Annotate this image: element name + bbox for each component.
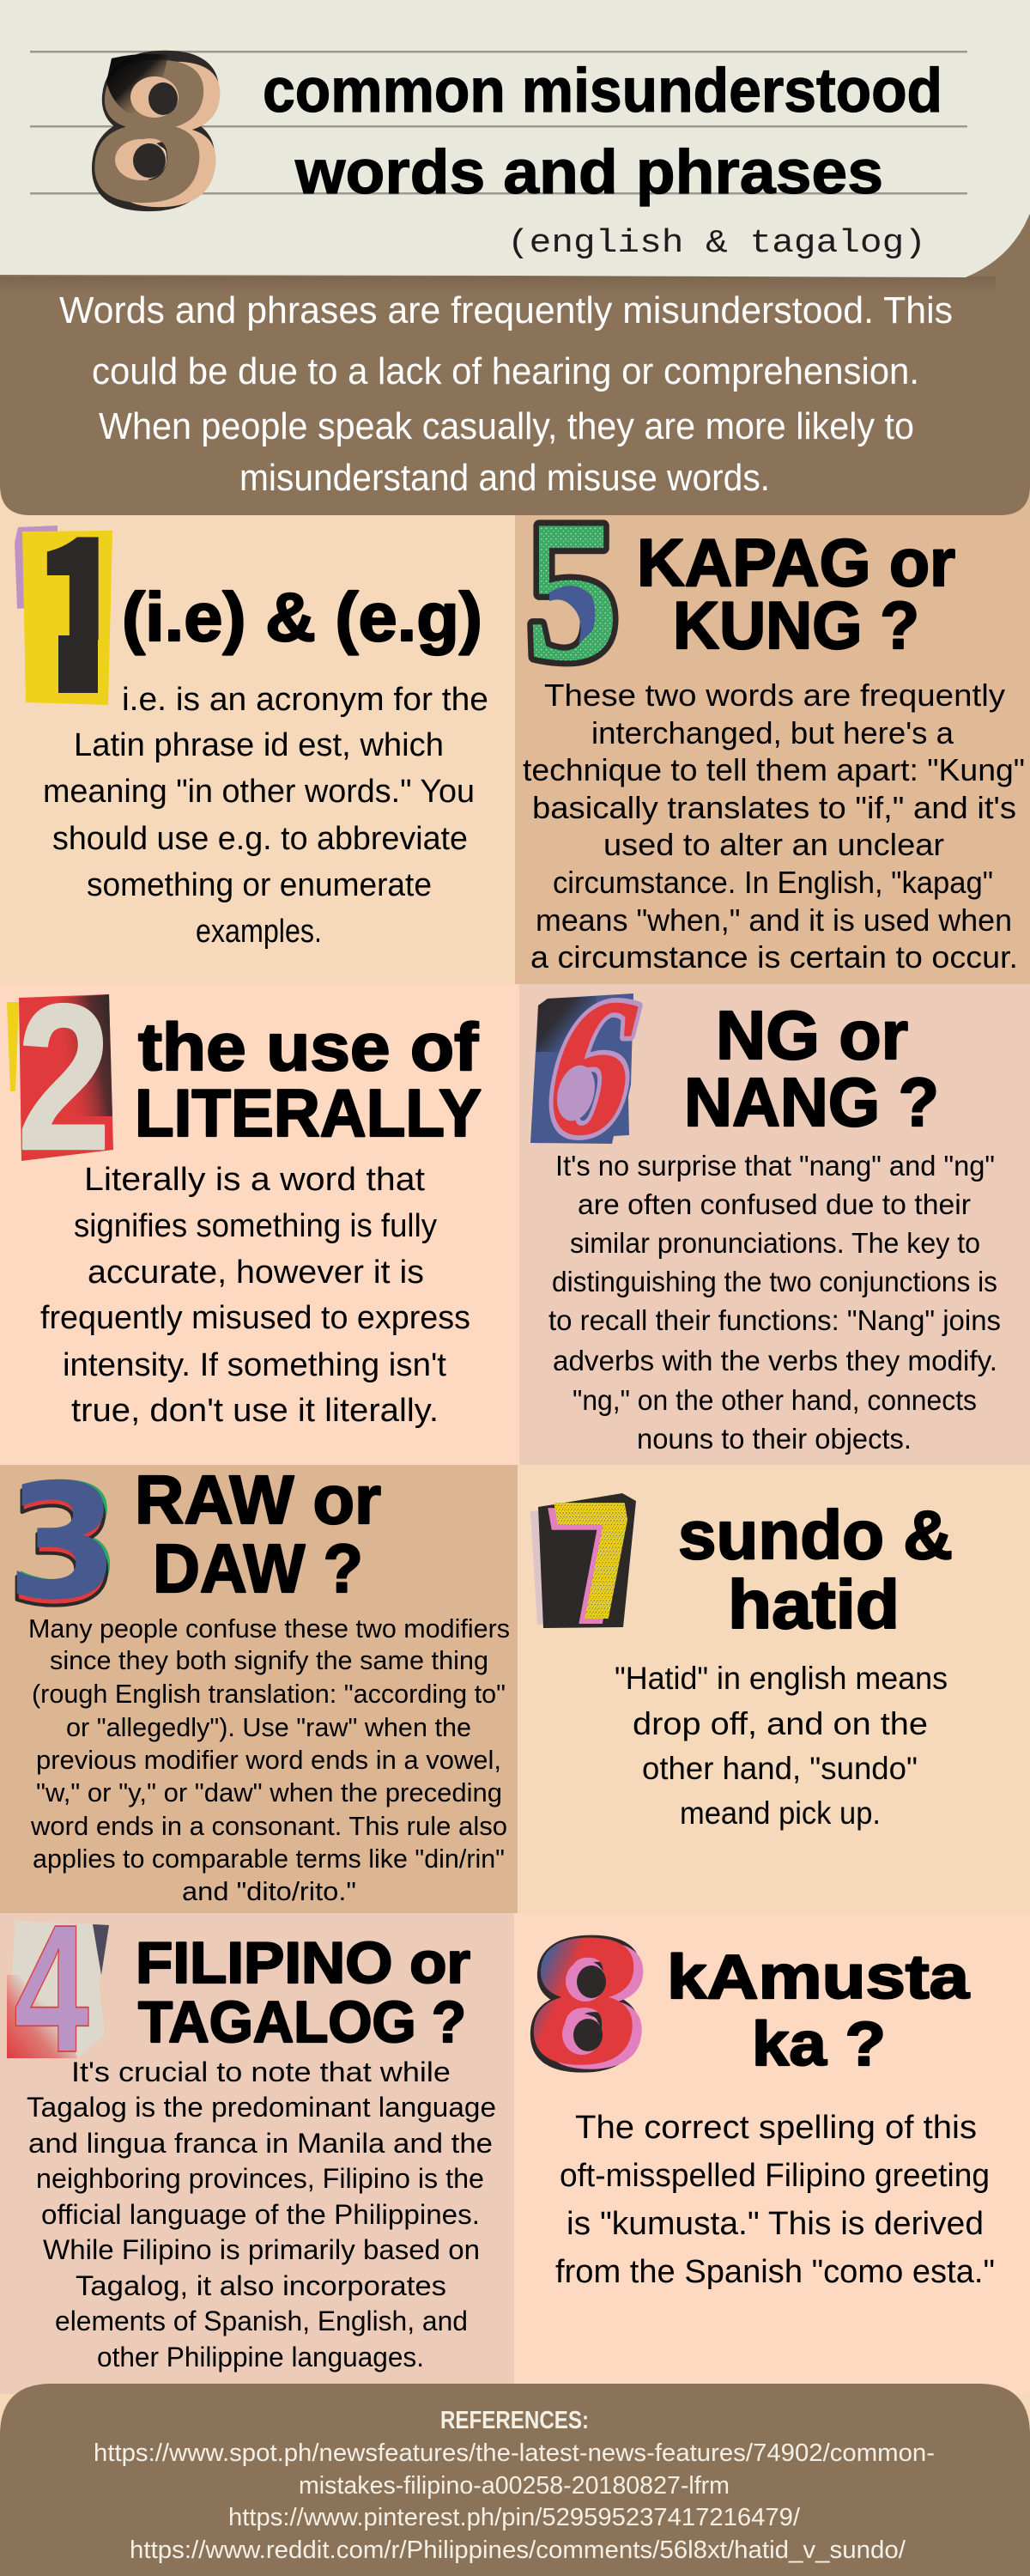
body text: since they both signify the same thing: [50, 1645, 488, 1675]
body text: something or enumerate: [87, 867, 432, 903]
body text: While Filipino is primarily based on: [43, 2234, 480, 2265]
body text: is "kumusta." This is derived: [566, 2206, 984, 2242]
body text: true, don't use it literally.: [71, 1393, 439, 1429]
body text: intensity. If something isn't: [63, 1347, 446, 1383]
icon: number 6 on blue paper: 6: [525, 959, 662, 1176]
icon: number 6 on blue paper: 6: [525, 959, 662, 1176]
body text: and lingua franca in Manila and the: [28, 2128, 493, 2159]
body text: used to alter an unclear: [603, 827, 944, 862]
body text: nouns to their objects.: [637, 1423, 912, 1455]
reference links: https://www.pinterest.ph/pin/529595237417216479/: [228, 2504, 801, 2531]
icon: large number 8: 8: [75, 26, 225, 246]
icon: number 3: 3: [9, 1450, 123, 1635]
icon: number 8: 8: [528, 1911, 661, 2106]
icon: number 3: 3: [6, 1450, 119, 1635]
intro text: could be due to a lack of hearing or comprehension.: [92, 350, 919, 392]
body text: examples.: [196, 914, 322, 950]
body text: applies to comparable terms like "din/rin": [33, 1844, 505, 1874]
body text: means "when," and it is used when: [536, 902, 1012, 938]
heading: RAW or: [135, 1461, 381, 1538]
icon: number 5: 5: [525, 479, 620, 703]
panel: title paper: [0, 0, 1030, 277]
body text: Tagalog, it also incorporates: [76, 2270, 446, 2301]
panel: 5 kapag or kung: [515, 479, 1030, 984]
body text: adverbs with the verbs they modify.: [553, 1345, 997, 1376]
body text: interchanged, but here's a: [591, 715, 954, 750]
icon: number 1 on yellow paper: [15, 526, 112, 705]
body text: from the Spanish "como esta.": [555, 2254, 995, 2290]
heading: FILIPINO or: [136, 1930, 470, 1996]
heading line two: NANG ?: [684, 1064, 939, 1140]
body text: [615, 1661, 948, 1831]
body text: circumstance. In English, "kapag": [553, 865, 993, 900]
icon: number 8: 8: [520, 1909, 653, 2105]
icon: number 2 on red paper: 2: [17, 961, 111, 1194]
body text: drop off, and on the: [633, 1706, 928, 1741]
body text: a circumstance is certain to occur.: [530, 939, 1018, 975]
body text: i.e. is an acronym for the: [122, 682, 488, 718]
icon: number 7 on dark paper: 7: [534, 1477, 656, 1662]
body text: [27, 2057, 496, 2372]
body text: frequently misused to express: [40, 1300, 470, 1336]
icon: large number 8: 8: [79, 23, 233, 247]
body text: The correct spelling of this: [575, 2110, 977, 2146]
panel: 7 sundo and hatid: [518, 1465, 1030, 1913]
body text: [555, 2110, 995, 2290]
panel: 4 filipino or tagalog: [0, 1886, 514, 2394]
heading: (i.e) & (e.g): [122, 579, 482, 655]
intro text: When people speak casually, they are more likely to: [99, 405, 914, 447]
panel: 2 the use of literally: [0, 961, 519, 1465]
icon: large number 8: 8: [91, 26, 241, 250]
heading line two: KUNG ?: [673, 587, 919, 663]
heading: KAPAG or: [637, 525, 955, 600]
body text: (rough English translation: "according to": [32, 1679, 506, 1709]
body text: similar pronunciations. The key to: [570, 1227, 980, 1259]
icon: number 4 on torn paper: 4: [14, 1886, 89, 2090]
body text: or "allegedly"). Use "raw" when the: [66, 1712, 471, 1742]
body text: Tagalog is the predominant language: [27, 2092, 496, 2123]
icon: number 3: 3: [6, 1456, 119, 1641]
heading line two: DAW ?: [153, 1530, 363, 1607]
subtitle: (english & tagalog): [507, 225, 926, 262]
icon: number 7 on dark paper: 7: [540, 1472, 662, 1657]
body text: [43, 682, 488, 950]
body text: word ends in a consonant. This rule also: [30, 1811, 507, 1841]
body text: These two words are frequently: [544, 677, 1005, 713]
body text: should use e.g. to abbreviate: [52, 821, 468, 857]
body text: official language of the Philippines.: [41, 2199, 480, 2230]
panel: 6 ng or nang: [519, 959, 1030, 1465]
body text: It's no surprise that "nang" and "ng": [555, 1150, 995, 1182]
body text: [28, 1613, 510, 1906]
heading: kAmusta: [667, 1943, 970, 2012]
reference links: mistakes-filipino-a00258-20180827-lfrm: [299, 2472, 730, 2500]
body text: neighboring provinces, Filipino is the: [36, 2163, 484, 2194]
body text: are often confused due to their: [578, 1188, 971, 1220]
heading: NG or: [716, 997, 908, 1073]
body text: "ng," on the other hand, connects: [573, 1384, 977, 1416]
icon: number 8: 8: [518, 1906, 651, 2102]
intro text: [59, 289, 953, 499]
reference links: [94, 2439, 935, 2564]
body text: and "dito/rito.": [182, 1876, 356, 1906]
body text: [548, 1150, 1001, 1455]
intro text: Words and phrases are frequently misunderstood. This: [59, 289, 953, 331]
body text: other Philippine languages.: [97, 2342, 424, 2372]
body text: [523, 677, 1025, 975]
body text: meand pick up.: [680, 1795, 881, 1831]
heading: the use of: [138, 1009, 479, 1084]
body text: technique to tell them apart: "Kung": [523, 752, 1025, 787]
body text: to recall their functions: "Nang" joins: [548, 1304, 1001, 1336]
heading line two: hatid: [728, 1566, 900, 1643]
heading line two: TAGALOG ?: [138, 1990, 466, 2055]
body text: Literally is a word that: [84, 1162, 425, 1198]
body text: basically translates to "if," and it's: [532, 790, 1016, 825]
body text: previous modifier word ends in a vowel,: [36, 1745, 501, 1775]
reference links: https://www.reddit.com/r/Philippines/comments/56l8xt/hatid_v_sundo/: [130, 2537, 906, 2564]
heading line two: ka ?: [752, 2010, 886, 2079]
body text: Many people confuse these two modifiers: [28, 1613, 510, 1643]
body text: accurate, however it is: [88, 1255, 424, 1291]
icon: number 5: 5: [525, 479, 620, 703]
heading line two: LITERALLY: [135, 1075, 482, 1151]
reference links: https://www.spot.ph/newsfeatures/the-latest-news-features/74902/common-: [94, 2439, 935, 2467]
body text: other hand, "sundo": [642, 1751, 918, 1786]
intro text: misunderstand and misuse words.: [239, 457, 770, 499]
panel: 3 raw or daw: [0, 1450, 518, 1913]
panel: 8 kamusta ka: [514, 1906, 1030, 2394]
heading: sundo &: [678, 1497, 953, 1573]
title: common misunderstood: [263, 57, 942, 125]
body text: distinguishing the two conjunctions is: [552, 1266, 997, 1297]
body text: "w," or "y," or "daw" when the preceding: [36, 1777, 502, 1807]
body text: Latin phrase id est, which: [74, 727, 444, 763]
icon: number 1 on yellow paper: 1: [31, 444, 130, 755]
panel: intro: [0, 215, 1030, 515]
body text: signifies something is fully: [74, 1208, 437, 1244]
body text: oft-misspelled Filipino greeting: [560, 2158, 990, 2194]
panel: 1 i.e and e.g: [15, 526, 488, 949]
references heading: REFERENCES:: [440, 2407, 589, 2434]
body text: meaning "in other words." You: [43, 774, 475, 810]
panel: references: [0, 2384, 1030, 2576]
body text: [40, 1162, 470, 1429]
title line two: words and phrases: [294, 138, 883, 207]
body text: It's crucial to note that while: [71, 2057, 451, 2087]
body text: "Hatid" in english means: [615, 1661, 948, 1696]
body text: elements of Spanish, English, and: [55, 2306, 468, 2336]
